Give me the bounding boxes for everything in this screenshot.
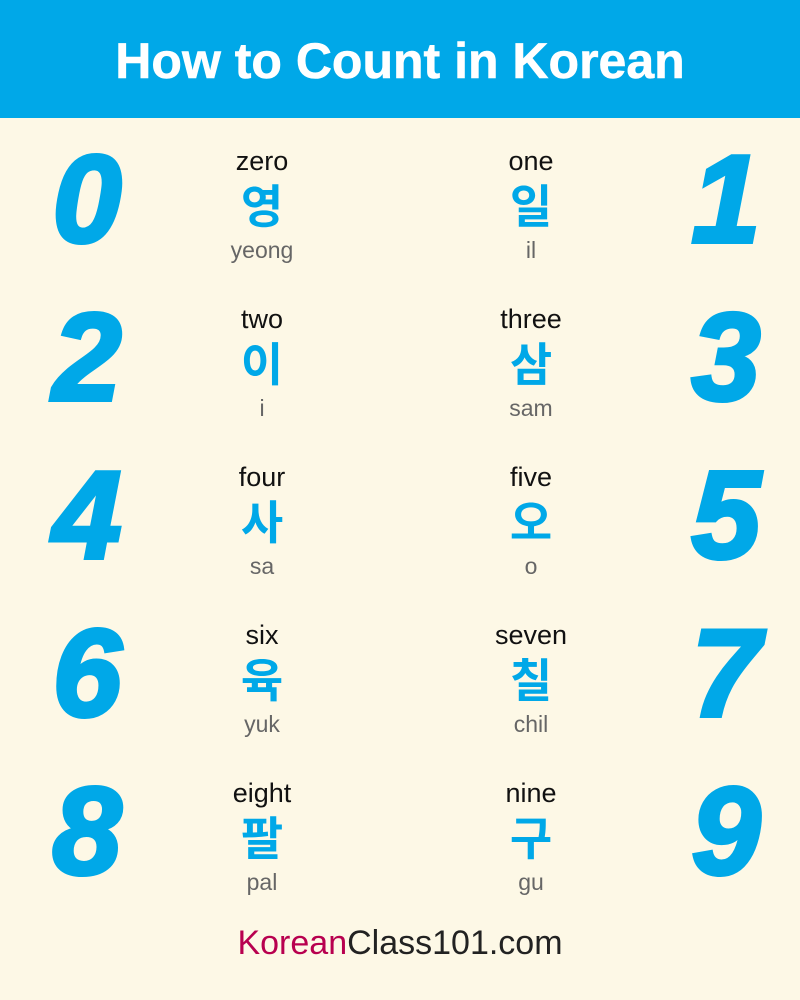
footer brand: KoreanClass101.com [237, 924, 563, 962]
numeral 4: 4 [53, 447, 121, 585]
item: one: one [508, 146, 554, 176]
numeral 3: 3 [692, 289, 760, 427]
item: two: two [241, 304, 283, 334]
title: How to Count in Korean [115, 33, 685, 89]
item: nine: 구 [510, 803, 552, 869]
item: eight: pal [247, 869, 277, 895]
item: nine [505, 778, 557, 895]
item: zero: 영 [241, 171, 283, 237]
item: seven: chil [514, 711, 548, 737]
numeral 2: 2 [53, 289, 121, 427]
item: eight [233, 778, 292, 895]
item: five: 오 [510, 487, 552, 553]
item: two: 이 [241, 329, 283, 395]
item: four: sa [250, 553, 274, 579]
item: six: six [246, 620, 278, 650]
item: three: 삼 [510, 329, 552, 395]
numeral 8: 8 [53, 763, 121, 901]
item: seven: seven [495, 620, 567, 650]
item: zero: yeong [231, 237, 293, 263]
item: zero: zero [236, 146, 288, 176]
item: five [510, 462, 552, 579]
item: five: o [525, 553, 537, 579]
item: nine: gu [518, 869, 544, 895]
item: seven [495, 620, 567, 737]
item: three [500, 304, 562, 421]
item: five: five [510, 462, 552, 492]
header bar [0, 0, 800, 118]
item: one: 일 [510, 171, 552, 237]
item: six: 육 [241, 645, 283, 711]
numeral 5: 5 [692, 447, 760, 585]
item: eight: eight [233, 778, 291, 808]
numeral 6: 6 [53, 605, 121, 743]
numeral 1: 1 [692, 131, 760, 269]
item: eight: 팔 [241, 803, 283, 869]
item: two: i [259, 395, 265, 421]
numeral 7: 7 [692, 605, 760, 743]
item: four [239, 462, 285, 579]
item: one [508, 146, 554, 263]
item: seven: 칠 [510, 645, 552, 711]
item: four: four [239, 462, 285, 492]
numeral 9: 9 [692, 763, 760, 901]
item: three: sam [509, 395, 553, 421]
item: six [241, 620, 283, 737]
numeral 0: 0 [53, 131, 121, 269]
item: one: il [526, 237, 536, 263]
item: three: three [500, 304, 562, 334]
item: four: 사 [241, 487, 283, 553]
item: six: yuk [244, 711, 280, 737]
item: nine: nine [505, 778, 557, 808]
item: two [241, 304, 283, 421]
item: zero [230, 146, 293, 263]
